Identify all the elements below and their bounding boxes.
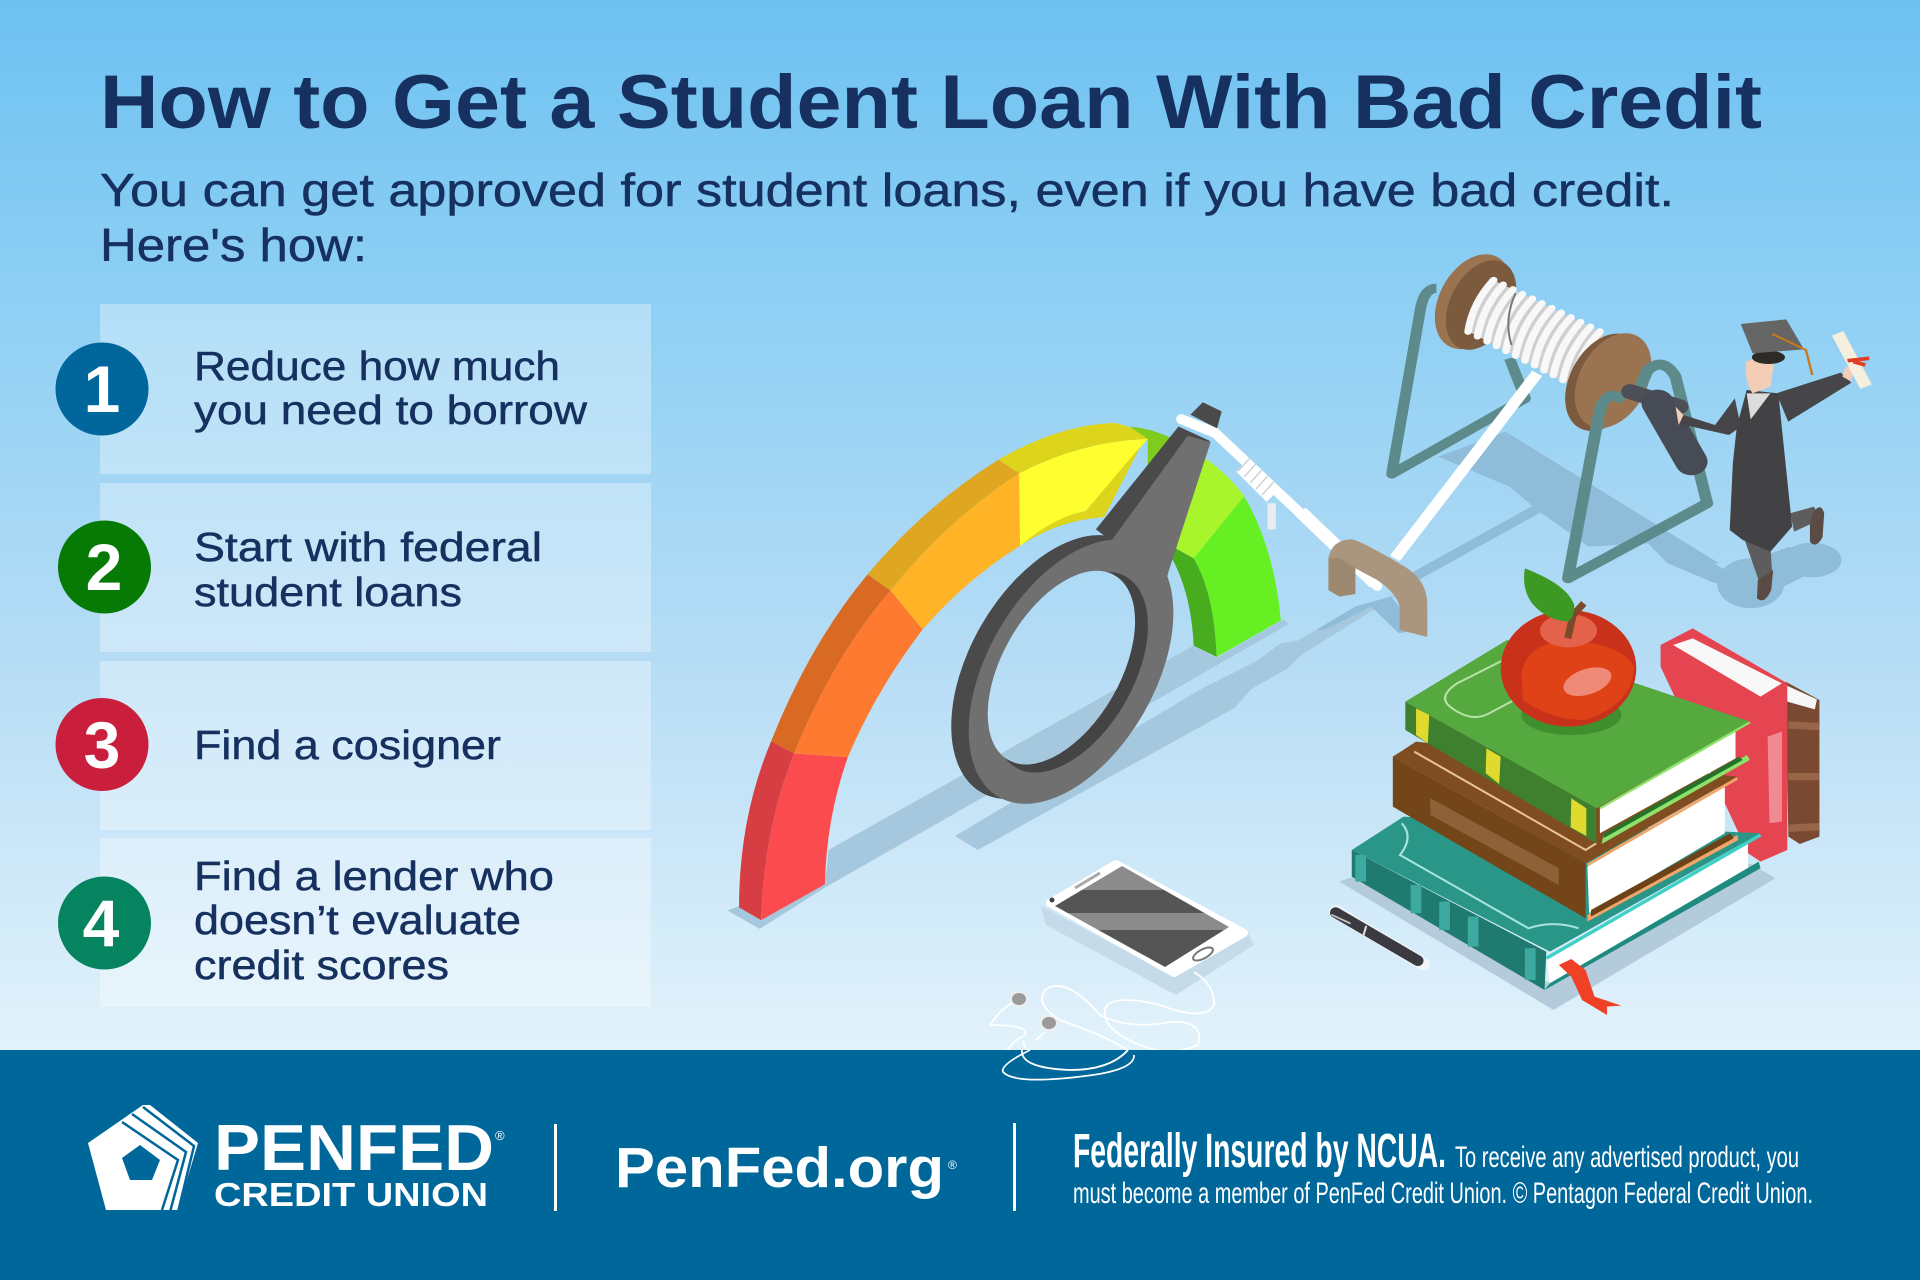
icon: number 4: 4 <box>83 886 120 960</box>
logo wordmark <box>214 1111 505 1213</box>
icon: number 2 <box>58 520 151 614</box>
icon: number 2: 2 <box>86 530 122 604</box>
panel: step 4 <box>58 838 651 1007</box>
rope to spool <box>1395 373 1537 558</box>
divider <box>554 1124 557 1211</box>
logo wordmark: PENFED <box>214 1111 494 1184</box>
text: step 2 <box>194 524 542 615</box>
text: step 1 <box>194 343 587 433</box>
icon: number 3 <box>56 698 148 791</box>
right frame <box>1568 365 1707 578</box>
apple <box>1501 568 1636 735</box>
logo wordmark: ® <box>495 1128 505 1143</box>
subtitle: Here's how: <box>100 219 367 271</box>
text: step 4: credit scores <box>194 942 449 988</box>
illustration: books and apple <box>1332 568 1819 1015</box>
logo: PenFed pentagon <box>88 1105 198 1212</box>
spool <box>1420 245 1666 440</box>
illustration: smartphone <box>1040 860 1254 995</box>
magnifying glass needle <box>951 402 1222 804</box>
text: step 1: Reduce how much <box>194 343 560 389</box>
panel: step 3 <box>56 661 651 830</box>
text: step 1: you need to borrow <box>194 387 587 433</box>
standing red book <box>1661 628 1787 862</box>
panel: step 1 <box>56 304 651 474</box>
website: ® <box>948 1158 957 1172</box>
bookmark <box>1559 959 1621 1015</box>
text: step 4: Find a lender who <box>194 853 554 899</box>
text: step 2: student loans <box>194 569 462 615</box>
text: step 3: Find a cosigner <box>194 722 501 768</box>
rope around needle <box>1181 419 1377 586</box>
legal text <box>1073 1125 1813 1210</box>
text: step 2: Start with federal <box>194 524 542 570</box>
footer band <box>0 1050 1920 1280</box>
wire over footer <box>1003 1050 1134 1080</box>
gauge shadow <box>728 593 1403 929</box>
icon: number 3: 3 <box>84 708 120 782</box>
books shadow <box>1339 863 1776 1010</box>
website: PenFed.org <box>615 1136 944 1200</box>
winch shadow <box>1316 432 1842 633</box>
pen <box>1332 912 1423 964</box>
illustration: credit score gauge <box>728 402 1403 929</box>
logo wordmark: CREDIT UNION <box>214 1176 488 1213</box>
divider <box>1013 1123 1016 1211</box>
teal book <box>1352 817 1761 1015</box>
legal text: Federally Insured by NCUA. <box>1073 1125 1446 1178</box>
title: How to Get a Student Loan With Bad Credit <box>100 60 1762 145</box>
panel: step 2 <box>58 483 651 652</box>
gauge segments <box>739 423 1281 920</box>
tan staple <box>1328 539 1427 637</box>
left frame <box>1392 288 1525 474</box>
winch handle <box>1630 392 1691 462</box>
green book <box>1405 640 1750 844</box>
icon: number 4 <box>58 876 151 970</box>
subtitle <box>100 164 1674 271</box>
brown book <box>1393 742 1738 922</box>
subtitle: You can get approved for student loans, even if you have bad credit. <box>100 164 1674 216</box>
earphones <box>990 972 1214 1079</box>
standing brown book <box>1786 682 1819 844</box>
icon: number 1: 1 <box>84 352 120 426</box>
illustration: winch spool and graduate <box>1300 245 1869 637</box>
text: step 4 <box>194 853 554 988</box>
graduate <box>1676 319 1869 600</box>
icon: number 1 <box>56 342 148 436</box>
text: step 4: doesn’t evaluate <box>194 897 521 943</box>
